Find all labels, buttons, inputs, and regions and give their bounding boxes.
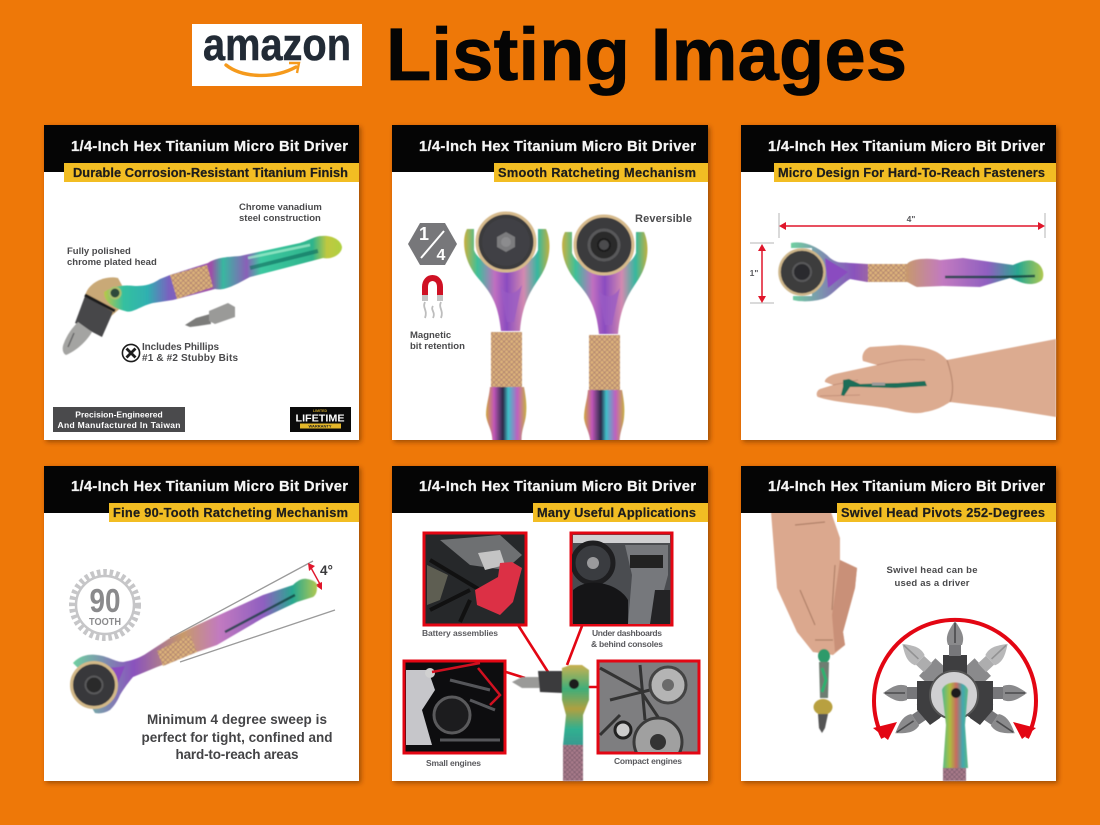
swivel bit positions — [883, 621, 1027, 743]
sweep angle lines — [170, 561, 335, 662]
warranty badge: LIFETIME — [296, 414, 345, 424]
steel label: steel construction — [239, 213, 321, 224]
amazon logo — [192, 19, 362, 86]
icon: phillips — [122, 344, 140, 362]
icon: gear — [72, 572, 138, 638]
bits label: #1 & #2 Stubby Bits — [142, 353, 238, 364]
product name: 1/4-Inch Hex Titanium Micro Bit Driver — [71, 139, 348, 155]
ratchet driver with bit — [63, 236, 342, 355]
connector lines — [506, 625, 598, 687]
photo: dashboard — [571, 533, 672, 625]
sweep description: Minimum 4 degree sweep is — [147, 712, 327, 727]
feature banner — [774, 163, 1056, 182]
spare bit — [185, 303, 235, 327]
warranty badge: WARRANTY — [308, 424, 332, 428]
magnetic label: Magnetic — [410, 330, 451, 341]
warranty badge: LIMITED — [313, 409, 327, 413]
header bar — [392, 466, 708, 513]
dashboard label — [591, 628, 663, 649]
panel: titanium finish — [44, 125, 359, 440]
sweep description line 2: perfect for tight, confined and — [142, 730, 332, 745]
battery label: Battery assemblies — [422, 628, 498, 638]
feature banner — [109, 503, 359, 522]
feature banner — [837, 503, 1056, 522]
header bar — [392, 125, 708, 172]
icon: quarter inch hex — [408, 223, 457, 265]
sweep description line 3: hard-to-reach areas — [176, 747, 298, 762]
head label: Fully polished — [67, 246, 131, 257]
hand holding driver — [771, 512, 857, 733]
reversible label: Reversible — [635, 213, 692, 225]
feature heading: Smooth Ratcheting Mechanism — [498, 165, 696, 180]
driver front view — [464, 213, 549, 445]
height dimension: 1" — [750, 268, 758, 278]
header bar — [741, 125, 1056, 172]
feature banner — [494, 163, 708, 182]
product name: 1/4-Inch Hex Titanium Micro Bit Driver — [768, 479, 1045, 495]
magnetic label: bit retention — [410, 341, 465, 352]
icon: gear: 90 — [90, 582, 120, 619]
driver with bit — [512, 665, 589, 781]
product name: 1/4-Inch Hex Titanium Micro Bit Driver — [419, 139, 696, 155]
product name: 1/4-Inch Hex Titanium Micro Bit Driver — [768, 139, 1045, 155]
panel: micro design — [741, 125, 1056, 440]
origin badge — [53, 407, 185, 432]
photo: small engine — [404, 661, 505, 753]
icon: quarter inch hex: 4 — [437, 247, 446, 264]
feature banner — [64, 163, 359, 182]
dashboard label: Under dashboards — [592, 628, 662, 638]
icon: magnet — [422, 278, 443, 318]
driver back view — [562, 216, 647, 448]
panel: swivel head — [741, 466, 1056, 781]
driver side view — [780, 242, 1043, 301]
panel: applications — [392, 466, 708, 781]
dashboard label: & behind consoles — [591, 639, 663, 649]
icon: quarter inch hex: 1 — [419, 224, 429, 244]
head label: chrome plated head — [67, 257, 157, 268]
origin badge: Precision-Engineered — [75, 410, 163, 420]
product name: 1/4-Inch Hex Titanium Micro Bit Driver — [419, 479, 696, 495]
width dimension: 4" — [907, 214, 915, 224]
feature banner — [533, 503, 708, 522]
compact engines label: Compact engines — [614, 756, 682, 766]
feature heading: Fine 90-Tooth Ratcheting Mechanism — [113, 505, 348, 520]
origin badge: And Manufactured In Taiwan — [58, 420, 180, 430]
feature heading: Micro Design For Hard-To-Reach Fasteners — [778, 165, 1045, 180]
amazon logo: amazon — [203, 19, 351, 70]
driver angled — [72, 579, 317, 713]
panel: smooth ratcheting — [392, 125, 708, 448]
swivel description: used as a driver — [894, 578, 970, 589]
red pivot arrow — [873, 620, 1036, 740]
feature heading: Many Useful Applications — [537, 505, 696, 520]
feature heading: Durable Corrosion-Resistant Titanium Finish — [73, 165, 348, 180]
icon: gear: TOOTH — [89, 616, 121, 628]
height dimension — [750, 243, 774, 303]
header bar — [44, 125, 359, 172]
width dimension — [779, 213, 1045, 238]
warranty badge — [290, 407, 351, 432]
product name: 1/4-Inch Hex Titanium Micro Bit Driver — [71, 479, 348, 495]
steel label: Chrome vanadium — [239, 202, 322, 213]
header bar — [44, 466, 359, 513]
small engines label: Small engines — [426, 758, 481, 768]
swivel description: Swivel head can be — [886, 565, 978, 576]
handle — [942, 682, 968, 781]
header bar — [741, 466, 1056, 513]
sweep angle lines: 4° — [320, 563, 333, 578]
photo: battery — [424, 533, 526, 625]
photo: compact engine — [598, 661, 699, 766]
bits label: Includes Phillips — [142, 342, 219, 353]
feature heading: Swivel Head Pivots 252-Degrees — [841, 505, 1045, 520]
swivel description — [886, 565, 978, 589]
panel: 90 tooth ratchet — [44, 466, 359, 781]
hand holding driver — [817, 339, 1056, 417]
title: Listing Images — [386, 13, 907, 96]
